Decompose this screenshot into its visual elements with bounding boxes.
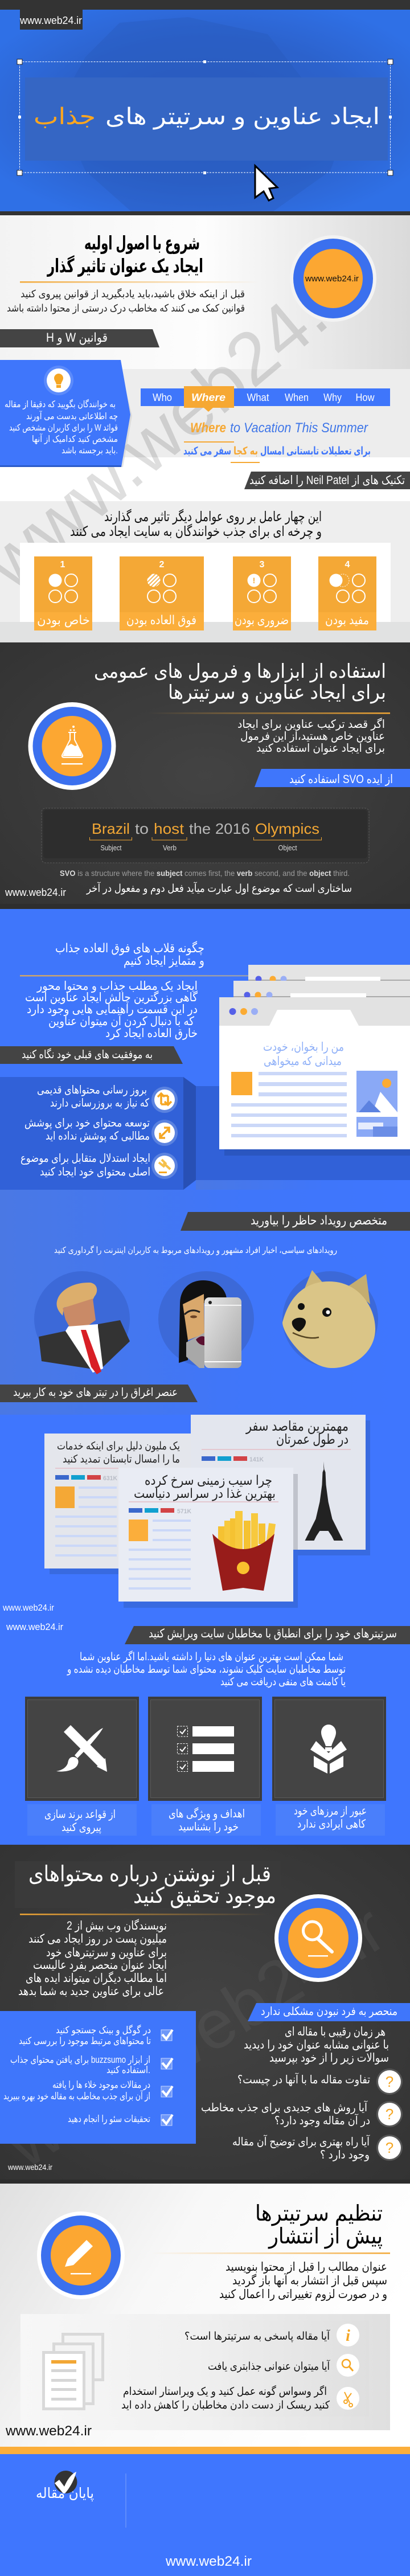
list item: expand [24, 1117, 178, 1146]
heading: research [15, 1861, 281, 1909]
text: hooks intro: خارق العاده ایجاد کرد [105, 1027, 198, 1040]
text: hooks intro: گاهی بزرگترین چالش ایجاد عناوین است [25, 990, 198, 1004]
text: basics intro: قوانین کمک می کنند که مخاطب درک درستی از محتوا داشته باشد [7, 302, 245, 314]
logo text: www.web24.ir [7, 2163, 52, 2172]
panel: SVO example: Brazil [92, 820, 130, 837]
text: current events: رویدادهای سیاسی، اخبار افراد مشهور و رویدادهای مربوط به کاربران اینترنت را گرداوری کنید [54, 1245, 337, 1255]
check row 1 [19, 2024, 173, 2046]
heading: hooks: چگونه قلاب های فوق العاده جذاب [55, 941, 204, 955]
text: tip: .باید برجسته باشد [62, 446, 118, 456]
panel: SVO example [42, 808, 369, 863]
card 2: 2 [159, 560, 165, 570]
check row 3: از آن برای جذب مخاطب به مقاله خود بهره ببیرید [3, 2090, 150, 2102]
question 2 [201, 2100, 403, 2127]
icon: fries [212, 1511, 276, 1591]
text: tip [5, 399, 118, 456]
text: audience: یا کامنت های منفی دریافت می کنید [220, 1676, 346, 1688]
ribbon: not unique is fine [248, 2003, 410, 2021]
header band [0, 0, 410, 215]
nav bar: question words: Why [323, 392, 342, 403]
nav bar: question words: What [247, 392, 269, 403]
question 2: ? [386, 2106, 393, 2123]
logo text: www.web24.ir [2, 1603, 55, 1613]
heading: research: قبل از نوشتن درباره محتواهای [28, 1862, 271, 1887]
question 3: آیا راه بهتری برای توضیح آن مقاله [232, 2134, 370, 2148]
logo tag [19, 10, 83, 30]
text: research intro: نویسندگان وب بیش از 2 [67, 1919, 167, 1932]
heading: basics: شروع با اصول اولیه [84, 232, 200, 255]
nav bar: question words: Who [153, 392, 172, 403]
list item: counter argument [20, 1152, 178, 1179]
ribbon: audience [125, 1626, 410, 1644]
card: travel: 141K [249, 1456, 264, 1463]
card: fries: چرا سیب زمینی سرخ کرده [145, 1473, 272, 1488]
text: research intro: برای عناوین و سرتیترهای خود [46, 1946, 167, 1959]
heading: tools [94, 661, 386, 704]
icon: flask badge [28, 702, 116, 790]
text: competitor [244, 2025, 389, 2065]
question 2: در آن مقاله وجود دارد؟ [274, 2113, 370, 2127]
icon: documents [43, 2334, 102, 2409]
check row 3: در مقالات موجود خلاء ها را یافته [52, 2079, 150, 2090]
selection frame with handles [17, 59, 393, 175]
panel: SVO example: Verb [163, 843, 177, 852]
list item: expand: توسعه محتوای خود برای پوشش [24, 1117, 150, 1130]
headline example [183, 420, 371, 463]
icon: Eiffel tower [305, 1461, 343, 1541]
nav bar: question words: How [355, 392, 375, 403]
ribbon: current event expert: متخصص رویداد حاظر را بیاورید [251, 1213, 387, 1228]
nav bar: question words: Where [191, 392, 226, 403]
ribbon: SVO idea: از ایده SVO استفاده کنید [289, 773, 393, 786]
text: competitor: سوالات زیر را از خود بپرسید [269, 2051, 389, 2065]
list item: update: که نیاز به بروزرسانی دارند [50, 1097, 149, 1109]
check row 1: تا محتواهای مرتبط موجود را بررسی کنید [19, 2036, 151, 2046]
question 3 [232, 2134, 403, 2161]
logo text: www.web24.ir [165, 2554, 252, 2569]
panel: SVO example: the 2016 [189, 820, 250, 837]
text: basics intro [7, 288, 245, 314]
captions: از قواعد برند سازی [44, 1808, 116, 1821]
illustration: browser windows [219, 965, 410, 1156]
panel: list of successes [0, 1077, 196, 1190]
text: competitor: هر زمان رقیبی با مقاله ای [285, 2025, 386, 2038]
check row 4: تحقیقات سئو را انجام دهید [68, 2114, 150, 2124]
text: tools intro: عناوین خاص هستید،از این فرمول [240, 730, 385, 743]
card 4: مفید بودن [325, 613, 369, 627]
text: publish intro: عنوان مطالب را قبل از محتوا بنویسید [226, 2260, 387, 2274]
captions: خود را بشناسید [178, 1821, 239, 1833]
captions: کاهی ایرادی ندارد [297, 1818, 366, 1830]
captions [27, 1804, 385, 1836]
text: audience: توسط مخاطبان سایت کلیک نشوند، محتوای شما توسط مخاطبان دیده نشده و [67, 1664, 346, 1676]
panel: research section background [0, 1845, 410, 2184]
check row 3 [3, 2079, 173, 2102]
icon: magnifier badge [274, 1894, 362, 1982]
heading: hooks: و متمایز ایجاد کنیم [124, 953, 204, 968]
illustration: politician [34, 1271, 130, 1374]
icon: logo badge: www.web24.ir [305, 274, 359, 284]
card 3 [233, 556, 291, 630]
card 2 [120, 556, 204, 630]
card 3: 3 [260, 560, 265, 570]
text: tip: مشخص کنید کدامیک از آنها [32, 433, 118, 445]
headline example: to Vacation This Summer [230, 420, 368, 436]
text: tip: قوائد W را برای کاربران مشخص کنید [9, 423, 118, 433]
ribbon: SVO idea [255, 769, 410, 787]
card 1: 1 [60, 560, 65, 570]
text: tools intro: برای ایجاد عنوان استفاده کنید [256, 742, 385, 755]
card: fries [118, 1468, 298, 1608]
check: editor [121, 2385, 359, 2411]
panel: SVO example: to [135, 820, 149, 837]
question 2: آیا روش های جدیدی برای جذب مخاطب [201, 2100, 368, 2114]
panel: tools and formulas section [0, 642, 410, 909]
text: hooks intro [25, 980, 198, 1040]
card 3: ! [253, 576, 255, 585]
card: one million reasons [44, 1434, 191, 1574]
watermark: www.web24.ir [0, 1890, 398, 2183]
text: audience [67, 1650, 346, 1688]
panel: SVO example: Olympics [255, 820, 319, 837]
card: one million reasons: یک ملیون دلیل برای اینکه خدمات [57, 1440, 180, 1452]
ribbon: W and H rules: قوانین W و H [46, 330, 108, 345]
text: hooks intro: ایجاد یک مطلب جذاب و محتوا محور [36, 980, 198, 993]
card 1: خاص بودن [37, 613, 90, 628]
card: one million reasons: ما را امسال تابستان تمدید کنید [63, 1453, 180, 1465]
text: SVO definition Persian: ساختاری است که موضوع اول عبارت میآید فعل دوم و مفعول در آخر [86, 881, 352, 895]
list item: update: بروز رسانی محتواهای قدیمی [37, 1084, 147, 1096]
panel: hooks section background [0, 909, 410, 1415]
logo text: www.web24.ir [5, 2423, 92, 2439]
text: tools intro: اگر قصد ترکیب عناوین برای ایجاد [237, 718, 385, 731]
heading: research: موجود تحقیق کنید [133, 1884, 276, 1909]
panel: SVO example: host [154, 820, 184, 837]
card: one million reasons: 631K [103, 1475, 117, 1482]
nav bar: question words [141, 386, 390, 412]
icon: check mark [55, 2471, 77, 2493]
text: research intro: عالی برای عناوین جدید به شما بدهد [18, 1985, 164, 1998]
headline example: Where [190, 420, 226, 436]
heading: publish: تنظیم سرتیترها [255, 2202, 383, 2226]
question 3: ? [386, 2139, 393, 2156]
check row 1: در گوگل و بینک جستجو کنید [56, 2024, 151, 2036]
logo text: www.web24.ir [5, 887, 66, 898]
check: search [208, 2354, 359, 2377]
captions: پیروی کنید [62, 1821, 101, 1834]
heading: tools: استفاده از ابزارها و فرمول های عمومی [94, 661, 386, 683]
heading: basics [47, 232, 203, 277]
text: hooks intro: در این قسمت راهنمایی هایی وجود دارد [27, 1003, 198, 1016]
icon box: branding [25, 1697, 139, 1801]
text: research intro: ایجاد عنوان منحصر بفرد عالیست [33, 1959, 167, 1972]
icon: light bulb [44, 366, 73, 395]
check row 2: .استفاده کنید [106, 2065, 150, 2075]
card: fries: بهترین غذا در سراسر دنیاست [134, 1486, 276, 1501]
list item: expand: مطالبی که پوشش نداده اید [46, 1130, 150, 1143]
heading: publish: پیش از انتشار [268, 2225, 383, 2249]
check: search: آیا میتوان عنوانی جذابتری یافت [208, 2359, 330, 2373]
icon: logo badge [290, 235, 376, 322]
card: travel: مهمترین مقاصد سفر [245, 1419, 348, 1434]
illustration: doge [282, 1270, 378, 1368]
panel: SVO example: Object [278, 843, 297, 852]
ribbon: W and H rules [0, 329, 159, 347]
text: SVO definition: SVO is a structure where the subject comes first, the verb second, and the object third. [60, 869, 350, 878]
logo tag: www.web24.ir [19, 15, 82, 26]
list item: counter argument: ایجاد استدلال متقابل برای موضوع [20, 1152, 150, 1165]
panel: SVO example: Subject [100, 843, 122, 852]
title box: ایجاد عناوین و سرتیتر های [105, 104, 380, 130]
check: info: آیا مقاله پاسخی به سرتیترها است؟ [184, 2329, 330, 2342]
text: four factors [70, 509, 322, 539]
panel: blue tip callout [0, 360, 132, 467]
panel: publish section [0, 2184, 410, 2447]
question 1: تفاوت مقاله ما با آنها در چیست؟ [237, 2072, 370, 2086]
card 4 [318, 556, 376, 630]
text: four factors: و چرخه ای برای جذب خوانندگان به سایت ایجاد می کنند [70, 523, 322, 539]
card 1 [34, 556, 92, 630]
captions: عبور از مرزهای خود [294, 1805, 367, 1817]
text: research intro [18, 1919, 167, 1998]
captions: اهداف و ویژگی های [169, 1807, 245, 1820]
heading: tools: برای ایجاد عناوین و سرتیترها [168, 682, 386, 704]
ribbon: current event expert [181, 1212, 410, 1231]
illustration: browser windows: میدانی که میخواهی [264, 1055, 342, 1068]
icon box: goals checklist [148, 1697, 262, 1801]
check: editor: اگر وسواس گونه عمل کنید و یک ویراستار استخدام [123, 2385, 327, 2398]
text: research intro: میلیون پست در روز ایجاد می کنند [28, 1932, 167, 1946]
list item: update [37, 1084, 178, 1113]
illustration: browser windows: من را بخوان، خودت [263, 1041, 344, 1054]
text: end of article: پایان مقاله [36, 2485, 94, 2501]
question 1 [237, 2069, 403, 2095]
text: tools intro [237, 718, 385, 755]
panel: basics section background [0, 215, 410, 642]
heading: publish [255, 2202, 383, 2249]
heading: hooks [55, 941, 204, 968]
check row 2: از ابزار buzzsumo برای یافتن محتوای جذاب [10, 2054, 150, 2065]
text: tip: به خوانندگان بگویید که دقیقا از مقاله [5, 399, 116, 410]
headline example: سفر می کنید [183, 445, 231, 457]
nav bar: question words: When [285, 392, 309, 403]
title box [25, 77, 388, 161]
card 2: فوق العاده بودن [126, 613, 196, 627]
panel: research checklist [0, 2011, 196, 2144]
card: travel: در طول عمرتان [276, 1432, 348, 1447]
text: hooks intro: که با دنبال کردن آن میتوان عناوین [48, 1014, 194, 1028]
text: four factors: این چهار عامل بر روی عوامل دیگر تاثیر می گذارند [104, 509, 322, 525]
check: info: i [346, 2327, 350, 2345]
text: audience: شما ممکن است بهترین عنوان های دنیا را داشته باشید.اما اگر عناوین شما [80, 1650, 343, 1663]
illustration: celebrity with phone [158, 1271, 254, 1368]
card 4: 4 [345, 560, 350, 570]
logo text: www.web24.ir [6, 1621, 63, 1632]
icon: mouse cursor [255, 166, 277, 200]
text: research intro: اما مطالب دیگران میتواند ایده های [26, 1971, 167, 1985]
icon: pencil badge [37, 2211, 125, 2299]
footer band [0, 2447, 410, 2576]
text: publish intro: و در صورت لزوم تغییراتی را اعمال کنید [219, 2288, 387, 2301]
panel: four factor cards [20, 543, 391, 630]
check: info [184, 2324, 359, 2346]
panel: audience section [0, 1621, 410, 1845]
icon box: idea in box [272, 1697, 386, 1801]
card: travel [191, 1415, 370, 1555]
title box: جذاب [34, 104, 96, 129]
ribbon: exaggeration [0, 1385, 198, 1402]
text: publish intro: سپس قبل از انتشار به آنها باز گردید [232, 2273, 387, 2287]
headline example: به کجا [233, 445, 258, 457]
card: fries: 571K [177, 1508, 191, 1515]
question 1: ? [386, 2073, 393, 2090]
heading: basics: ایجاد یک عنوان تاثیر گذار [47, 255, 203, 277]
question 3: وجود دارد ؟ [320, 2149, 370, 2161]
ribbon: previous successes: به موفقیت های قبلی خود نگاه کنید [22, 1048, 153, 1061]
ribbon: exaggeration: عنصر اغراق را در تیتر های خود به کار ببرید [13, 1386, 178, 1399]
check row 2 [10, 2054, 173, 2075]
ribbon: previous successes [0, 1046, 183, 1064]
text: tip: چه اطلاعاتی بدست می آورند [26, 411, 118, 422]
panel: checks [20, 2314, 390, 2430]
check: editor: کنید ریسک از دست دادن مخاطبان را کاهش داده اید [121, 2399, 330, 2411]
panel: headline cards background [0, 1415, 410, 1625]
text: basics intro: قبل از اینکه خلاق باشید،باید یادبگیرید از قوانین پیروی کنید [20, 288, 245, 300]
text: publish intro [219, 2260, 387, 2301]
card 3: ضروری بودن [235, 613, 289, 627]
list item: counter argument: اصلی محتوای خود ایجاد کنید [40, 1166, 150, 1178]
